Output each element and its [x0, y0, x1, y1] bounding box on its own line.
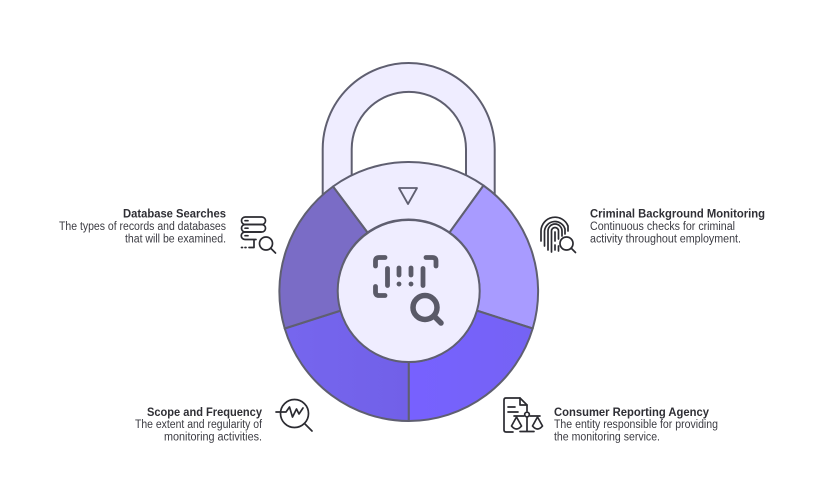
description: consumer line 2: the monitoring service.	[554, 432, 660, 444]
icon: magnifier with pulse	[276, 400, 312, 431]
description: database searches line 1: The types of records and databases	[59, 221, 226, 233]
padlock shackle	[323, 63, 495, 195]
segment: consumer reporting agency	[409, 310, 533, 421]
heading: database searches: Database Searches	[123, 206, 226, 220]
text: criminal background monitoring	[590, 206, 765, 246]
description: criminal line 2: activity throughout employment.	[590, 234, 741, 246]
description: scope line 2: monitoring activities.	[164, 432, 262, 444]
padlock body dial	[279, 162, 538, 421]
icon: triangle marker	[399, 188, 417, 204]
description: criminal line 1: Continuous checks for criminal	[590, 221, 735, 233]
icon: barcode scan with magnifier	[376, 258, 441, 323]
heading: consumer reporting agency: Consumer Reporting Agency	[554, 405, 709, 419]
segment: top	[333, 162, 484, 232]
center circle	[338, 220, 480, 362]
segment: database searches	[279, 186, 368, 328]
icon: database search	[241, 217, 276, 253]
icon: fingerprint search	[541, 217, 576, 252]
description: database searches line 2: that will be examined.	[125, 234, 226, 246]
segment: scope and frequency	[285, 310, 409, 421]
segment: criminal background monitoring	[450, 186, 538, 328]
text: scope and frequency	[135, 405, 263, 444]
text: database searches	[59, 206, 226, 246]
description: consumer line 1: The entity responsible for providing	[554, 419, 718, 431]
icon: document with scales	[504, 398, 542, 432]
text: consumer reporting agency	[554, 405, 718, 444]
description: scope line 1: The extent and regularity of	[135, 419, 263, 431]
heading: scope and frequency: Scope and Frequency	[147, 405, 262, 419]
heading: criminal background monitoring: Criminal Background Monitoring	[590, 206, 765, 220]
